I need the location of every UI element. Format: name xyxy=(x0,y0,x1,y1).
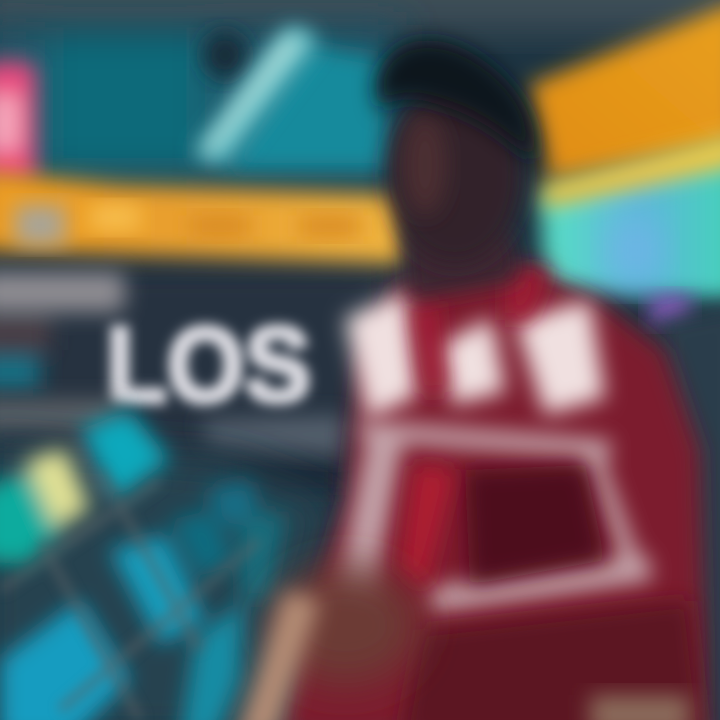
jacket: lower band xyxy=(400,600,705,720)
panel: neon stripe and teal glow right xyxy=(540,132,720,325)
person: hands xyxy=(270,565,420,685)
icon: pink sign left xyxy=(0,62,36,184)
jacket: white stripes xyxy=(350,430,650,620)
panel: cyan tiled floor lower left xyxy=(0,410,340,720)
panel: teal wall upper left xyxy=(0,25,400,185)
jacket: white chest panels xyxy=(345,290,605,420)
panel: orange sign upper right xyxy=(530,0,720,180)
jacket: red chest details xyxy=(412,265,552,395)
panel: grey sub-sign xyxy=(0,400,345,495)
panel: dark upper sign left xyxy=(0,272,125,389)
jacket: dark red lower panel xyxy=(465,465,605,585)
icon: dark round blob xyxy=(203,31,247,79)
jacket: red zip stripe xyxy=(400,465,455,590)
person: jacket xyxy=(235,265,705,720)
text: blurred LOS sign: LOS xyxy=(106,304,311,425)
panel: yellow marquee band xyxy=(0,170,405,264)
icon: cyan triangle sign xyxy=(195,25,385,170)
jacket: beige hem lower right xyxy=(590,695,690,720)
panel: right dark background xyxy=(660,305,720,720)
person: neck and face xyxy=(387,85,523,300)
person: baseball cap xyxy=(375,40,536,165)
